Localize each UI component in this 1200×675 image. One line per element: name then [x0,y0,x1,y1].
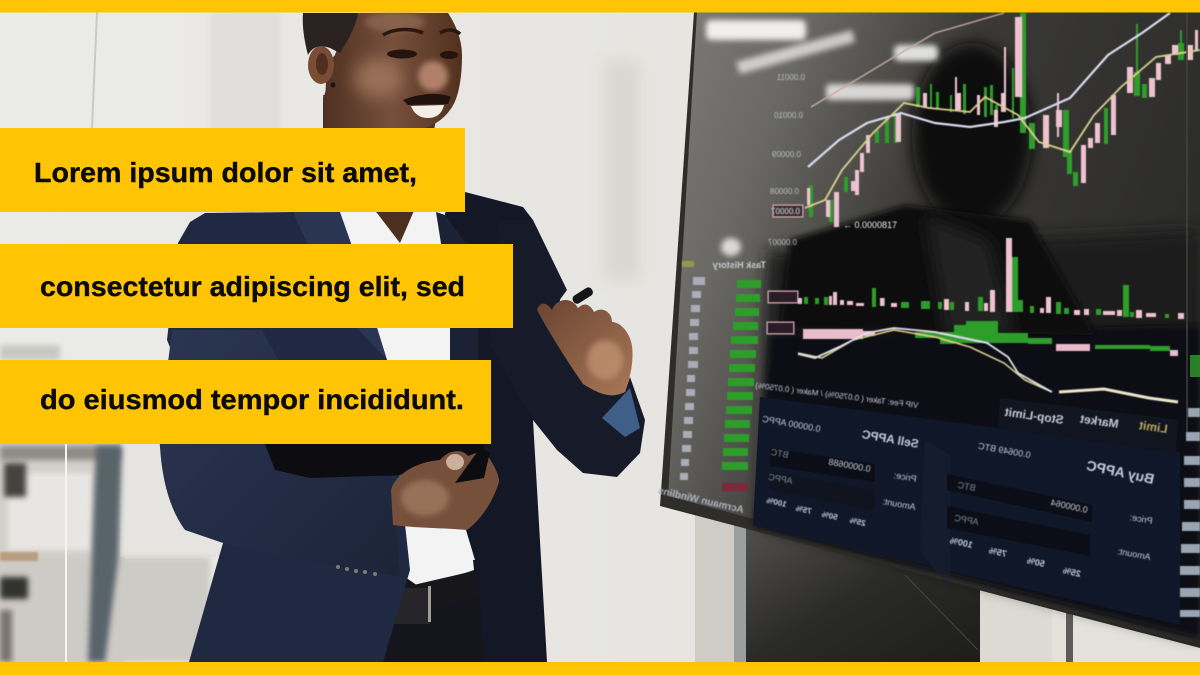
shirt cuff [602,388,640,437]
price axis labels: 0.00008 [770,187,799,196]
moustache [403,94,451,105]
folder under arm [265,444,484,478]
text band 3: do eiusmod tempor incididunt. [40,384,464,415]
hair [303,13,358,55]
price axis labels: 0.00010 [774,111,803,120]
panel labels, mirrored as seen in the reflection-flipped photo: Limit [1138,418,1169,436]
price axis labels: 0.00009 [772,150,801,159]
moving average lines [811,13,1004,107]
panel labels, mirrored as seen in the reflection-flipped photo: Market [1079,412,1120,431]
trousers [378,560,490,662]
belt [392,570,480,624]
top yellow border [0,0,1200,12]
right-hand column of the screen [1180,12,1200,617]
lower hand holding folder [391,448,499,530]
sleeve buttons [336,565,377,576]
trading order panel: Price: [893,470,917,484]
bottom yellow border [0,662,1200,675]
order book: Task History [713,260,766,270]
jacket left panel [167,212,410,662]
trading order panel: 0.000064 [1050,497,1089,515]
trading order panel: 75% [795,504,812,516]
trading order panel: Amount: [882,496,916,512]
trading order panel: BTC [769,447,789,460]
trading order panel: 100% [766,496,787,509]
reflection: ceiling lights [706,20,938,256]
lapel [293,212,387,360]
trading order panel: APPC [953,513,979,527]
lower dark zone of screen [760,230,1200,638]
price axis labels: 0.00007 [768,238,797,247]
input boxes [770,448,875,482]
ear [308,46,334,84]
trading order panel: 25% [849,516,866,528]
wall-mounted trading screen [656,12,1200,648]
trading order panel: 100% [949,535,974,550]
panel labels, mirrored as seen in the reflection-flipped photo: Sell APPC [860,427,920,451]
price axis labels: 0.00011 [776,73,805,82]
shirt [335,205,474,588]
neck [323,95,440,243]
trading order panel: 50% [1026,555,1046,569]
lapel right [436,212,478,360]
trading order panel: 25% [1062,565,1082,579]
text band 3 [0,360,491,444]
reflection: presenter silhouette [780,43,1095,335]
raised hand with pen [537,286,633,395]
text band 1: Lorem ipsum dolor sit amet, [34,157,417,188]
jacket right panel [445,192,560,662]
volume bars [768,238,1184,319]
eye and brow [383,29,460,35]
text band 2 [0,244,513,328]
head [303,12,462,128]
presenter [160,12,645,662]
earring [330,82,336,88]
price axis labels [768,73,897,247]
trading order panel: 0.00649 BTC [977,441,1031,460]
trading order panel: BTC [956,480,976,493]
trading order panel: VIP Fee: Taker ( 0.0750%) / Maker ( 0.0750%) [754,381,919,410]
trading order panel: 0.0000688 [828,457,871,474]
wall and stand below the screen [695,500,1200,662]
panel labels, mirrored as seen in the reflection-flipped photo: Buy APPC [1085,457,1156,487]
panel labels, mirrored as seen in the reflection-flipped photo [860,405,1169,487]
cheek highlight [354,58,402,98]
trading order panel: 75% [988,545,1008,559]
price axis labels: 0.00007 [771,207,800,216]
screen surface [668,12,1200,638]
forehead highlight [365,12,425,32]
trading order panel: Amount: [1117,546,1151,562]
panel labels, mirrored as seen in the reflection-flipped photo: Stop-Limit [1004,405,1065,427]
trading order panel: APPC [767,472,793,486]
text band 1 [0,128,465,212]
left sleeve [160,330,400,577]
order book: Acrmaun Windlins [656,485,745,516]
order book [656,260,766,516]
MACD histogram and lines [767,321,1178,402]
right arm sleeve [490,220,645,477]
price axis labels: ← 0.0000817 [843,220,897,230]
candlestick chart [805,13,1200,227]
smile [411,105,444,118]
trading order panel: 50% [821,510,838,522]
screen frame [660,12,1200,648]
text band 2: consectetur adipiscing elit, sed [40,271,465,302]
trading order panel: Price: [1129,512,1153,526]
trading order panel [753,381,1180,625]
trading order panel: 0.00000 APPC [761,414,821,434]
nose highlight [418,61,448,91]
